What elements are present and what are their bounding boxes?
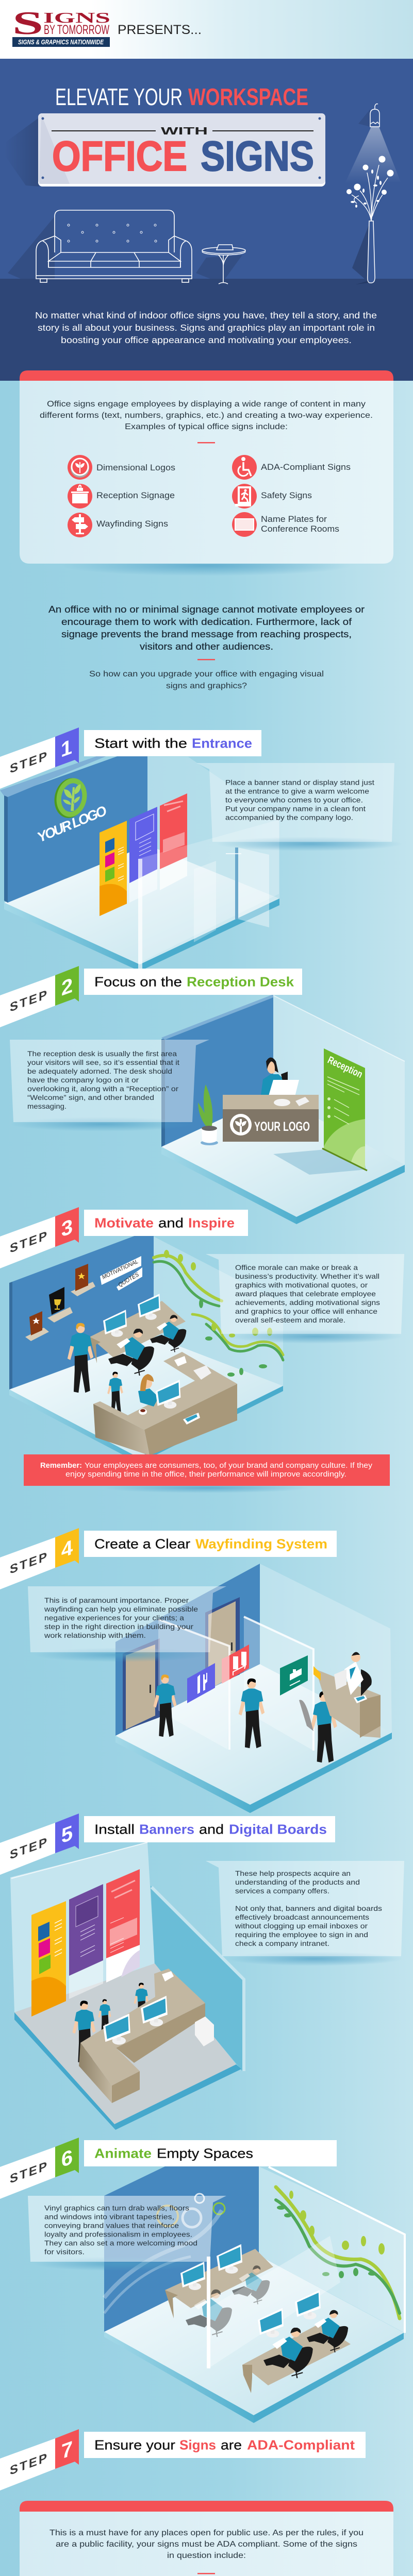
logo: Signs By Tomorrow: S (12, 5, 43, 41)
step 5 callout: effectively broadcast announcements (235, 1913, 369, 1921)
step 6 callout: loyalty and professionalism in employees. (44, 2230, 192, 2238)
step 5 callout: services a company offers. (235, 1887, 329, 1895)
panel intro text: different forms (text, numbers, graphics, etc.) and creating a two-way experience. (40, 411, 373, 420)
step 2 heading: STEP (10, 988, 47, 1015)
hero panel (0, 59, 413, 381)
step 3 illustration: open office (9, 1229, 283, 1461)
vase with plant (346, 156, 394, 284)
step 3 callout: graphics with motivational quotes, or (235, 1281, 368, 1289)
side table (196, 245, 245, 284)
front workstation (242, 2290, 351, 2393)
step 3 heading: STEP (10, 1229, 47, 1256)
step 6 illustration: animated empty spaces (104, 2166, 405, 2423)
step 6 heading: STEP (10, 2159, 47, 2187)
remember callout: Remember: (40, 1462, 82, 1470)
award plaques (25, 1264, 95, 1341)
intro text: story is all about your business. Signs and graphics play an important role in (38, 323, 375, 333)
step 3 callout: achievements, adding motivational signs (235, 1298, 380, 1307)
motivational quotes wall signs: QUOTES (118, 1272, 140, 1289)
title line: WORKSPACE (188, 83, 308, 110)
step 5 heading: 5 (61, 1821, 73, 1848)
logo on wall (51, 775, 90, 821)
step 3 heading: Motivate (94, 1215, 154, 1230)
ADA intro text (49, 2529, 364, 2574)
step 3 callout: award plaques that celebrate employee (235, 1290, 376, 1298)
motivational quotes wall signs: MOTIVATIONAL (101, 1259, 139, 1281)
panel intro text: Office signs engage employees by displaying a wide range of content in many (47, 400, 366, 409)
step 6 heading: Animate (94, 2145, 152, 2161)
step 4 callout: negative experiences for your clients; a (44, 1614, 184, 1622)
item: safety signs (232, 484, 312, 509)
lead-in text: signage prevents the brand message from reaching prospects, (61, 629, 352, 639)
step 3 heading: 3 (61, 1214, 73, 1242)
glass partition (207, 2236, 340, 2368)
step 7 heading: Ensure your (94, 2437, 175, 2452)
step 6 heading (0, 2138, 337, 2199)
step 7 heading (0, 2429, 366, 2490)
step 1 callout: Put your company name in a clean font (225, 805, 366, 813)
remember callout: Your employees are consumers, too, of your brand and company culture. If they (85, 1462, 373, 1470)
item: name plates: Conference Rooms (261, 524, 339, 534)
back workstation (165, 2244, 273, 2337)
step 2 callout: “Welcome” sign, and other branded (27, 1093, 154, 1101)
reception desk (223, 1095, 319, 1142)
step 1 illustration: entrance: YOUR LOGO (35, 803, 109, 845)
step 5 callout: requiring the employee to sign in and (235, 1930, 368, 1939)
step 5 heading: Banners (139, 1822, 194, 1837)
step 3 callout: and graphics to your office will enhance (235, 1307, 377, 1315)
item: ada-compliant signs (232, 455, 351, 480)
wall sign: SIGNS (201, 133, 314, 180)
step 4 heading: Wayfinding System (195, 1536, 327, 1552)
step 1 callout: at the entrance to give a warm welcome (225, 787, 369, 795)
step 4 callout (28, 1586, 226, 1662)
step 2 callout (10, 1040, 209, 1131)
step 2 heading: 2 (61, 973, 73, 1001)
step 1 heading: 1 (61, 735, 72, 762)
computer monitor (268, 1080, 299, 1104)
sign shadow (4, 117, 39, 187)
people in corridor (154, 1674, 337, 1762)
step 5 callout: These help prospects acquire an (235, 1869, 351, 1877)
step 3 callout: overall self-esteem and morale. (235, 1316, 345, 1324)
step 2 heading: Focus on the (94, 974, 182, 989)
presents label: PRESENTS... (118, 23, 202, 37)
step 2 callout: be adequately adorned. The desk should (27, 1067, 172, 1075)
step 3 callout: Office morale can make or break a (235, 1263, 358, 1272)
step 1 callout: to everyone who comes to your office. (225, 795, 363, 804)
panel: types of office signs (20, 370, 393, 576)
step 7 heading: STEP (10, 2451, 47, 2478)
step 7 heading: ADA-Compliant (247, 2437, 355, 2452)
lead-in text: signs and graphics? (166, 682, 247, 690)
step 5 callout (206, 1861, 404, 1966)
step 2 heading (0, 966, 302, 1027)
step 2 heading: Reception Desk (187, 974, 294, 989)
step 4 callout: This is of paramount importance. Proper (44, 1596, 189, 1604)
step 6 callout: They can also set a more welcoming mood (44, 2239, 197, 2247)
logo: Signs By Tomorrow: IGNS (43, 10, 110, 26)
step 4 callout: step in the right direction in building your (44, 1622, 193, 1631)
step 5 heading: Digital Boards (229, 1822, 327, 1837)
step 6 heading: Empty Spaces (157, 2145, 253, 2161)
step 6 callout (28, 2196, 226, 2271)
panel intro text (40, 400, 373, 443)
step 5 callout: check a company intranet. (235, 1939, 329, 1947)
step 1 heading: STEP (10, 749, 47, 776)
step 3 callout: business’s productivity. Whether it’s wall (235, 1272, 379, 1280)
step 6 callout: Vinyl graphics can turn drab walls, floors (44, 2204, 189, 2212)
intro text: No matter what kind of indoor office signs you have, they tell a story, and the (35, 310, 377, 320)
wall sign (38, 113, 325, 187)
ADA intro text: are a public facility, your signs must be ADA compliant. Some of the signs (56, 2540, 357, 2549)
step 7 heading: 7 (61, 2436, 73, 2464)
banner stands (100, 793, 187, 916)
banner stands (31, 1869, 140, 2016)
glass doors (138, 820, 279, 969)
item: name plates (232, 512, 339, 537)
item: reception signage: Reception Signage (96, 491, 175, 500)
step 4 heading: 4 (61, 1535, 73, 1563)
step 5 illustration: banners and digital boards (10, 1842, 244, 2130)
reception banner: Reception (326, 1055, 364, 1080)
header band (0, 0, 413, 59)
vine graphics (154, 1250, 283, 1377)
step 2 callout: The reception desk is usually the first area (27, 1049, 177, 1058)
step 1 heading (0, 727, 261, 789)
pendant lamp (345, 104, 401, 183)
desk row with workers (90, 1294, 186, 1376)
item: name plates: Name Plates for (261, 515, 327, 524)
logo: Signs By Tomorrow (12, 5, 110, 47)
step 2 callout: have the company logo on it or (27, 1076, 139, 1084)
step 6 heading: 6 (61, 2145, 73, 2172)
item: wayfinding signs: Wayfinding Signs (96, 519, 168, 529)
step 6 callout: for visitors. (44, 2247, 85, 2256)
item: reception signage (68, 484, 175, 509)
step 1 callout: accompanied by the company logo. (225, 813, 353, 821)
potted plant (198, 1084, 218, 1145)
item: ada-compliant signs: ADA-Compliant Signs (261, 463, 351, 472)
step 6 callout: conveying brand values that reinforce (44, 2222, 179, 2230)
logo: Signs By Tomorrow: BY TOMORROW (44, 23, 109, 37)
step 4 heading: Create a Clear (94, 1536, 190, 1552)
step 2 callout: your visitors will see, so it’s essential that it (27, 1058, 179, 1066)
step 4 callout: work relationship with them. (44, 1631, 146, 1639)
step 5 heading: and (199, 1822, 224, 1837)
glass partitions (158, 1617, 313, 1751)
step 2 callout: overlooking it, along with a “Reception” or (27, 1084, 178, 1093)
step 2 callout: messaging. (27, 1102, 67, 1110)
step 1 heading: Start with the (94, 736, 187, 751)
panel: ADA sign types (20, 2501, 393, 2576)
remember callout (24, 1454, 390, 1493)
panel intro text: Examples of typical office signs include: (125, 422, 288, 431)
L-shaped service desk (72, 1969, 214, 2103)
step 1 callout: Place a banner stand or display stand just (225, 778, 374, 786)
wall sign: WITH (161, 126, 208, 137)
step 2 illustration: reception desk (161, 994, 405, 1224)
intro text: boosting your office appearance and motivating your employees. (61, 335, 352, 345)
sofa (8, 210, 192, 282)
wall sign: OFFICE (52, 133, 187, 180)
step 5 heading (0, 1814, 335, 1875)
lead-in text (48, 604, 365, 690)
remember callout: enjoy spending time in the office, their performance will improve accordingly. (65, 1470, 346, 1479)
step 5 callout: Not only that, banners and digital boards (235, 1904, 382, 1912)
reception corner (299, 1652, 381, 1738)
item: dimensional logos (68, 455, 175, 480)
wall graphics (104, 2194, 225, 2313)
logo: Signs By Tomorrow: SIGNS & GRAPHICS NATIONWIDE (18, 39, 104, 46)
step 5 callout: without clogging up email inboxes or (235, 1922, 368, 1930)
motivational quotes wall signs (100, 1256, 142, 1291)
step 4 heading (0, 1528, 337, 1589)
step 3 heading: Inspire (188, 1215, 235, 1230)
vine graphic on glass (276, 2187, 400, 2318)
ADA intro text: This is a must have for any places open for public use. As per the rules, if you (49, 2529, 364, 2537)
step 3 heading (0, 1207, 248, 1268)
item: wayfinding signs (68, 513, 168, 537)
step 1 heading: Entrance (192, 736, 252, 751)
intro text (35, 310, 377, 345)
lead-in text: An office with no or minimal signage cannot motivate employees or (48, 604, 365, 615)
step 3 heading: and (158, 1215, 184, 1230)
step 5 heading: STEP (10, 1835, 47, 1862)
step 5 callout: understanding of the products and (235, 1878, 360, 1886)
reception desk: YOUR LOGO (254, 1120, 310, 1134)
step 4 illustration: wayfinding (115, 1564, 392, 1813)
lead-in text: visitors and other audiences. (140, 641, 273, 652)
step 3 callout (206, 1254, 404, 1344)
standing employee (68, 1323, 93, 1393)
step 4 heading: STEP (10, 1550, 47, 1577)
step 7 heading: Signs (179, 2437, 216, 2452)
wayfinding signs (187, 1645, 308, 1703)
title line: ELEVATE YOUR (55, 83, 183, 110)
item: dimensional logos: Dimensional Logos (96, 463, 175, 472)
step 1 illustration: entrance (0, 745, 279, 971)
step 6 callout: and windows into vibrant tapestries, (44, 2212, 174, 2221)
step 7 heading: are (221, 2437, 242, 2452)
L-shaped desk with staff (93, 1352, 237, 1455)
reception banner (322, 1048, 367, 1171)
lead-in text: encourage them to work with dedication. Furthermore, lack of (61, 617, 352, 627)
step 5 heading: Install (94, 1822, 135, 1837)
doors (123, 1597, 240, 1731)
ADA intro text: in question include: (167, 2551, 246, 2560)
item: safety signs: Safety Signs (261, 491, 312, 500)
lead-in text: So how can you upgrade your office with engaging visual (89, 670, 324, 679)
step 1 callout (196, 763, 402, 851)
step 4 callout: wayfinding can help you eliminate possible (44, 1605, 198, 1613)
receptionist (261, 1057, 289, 1095)
